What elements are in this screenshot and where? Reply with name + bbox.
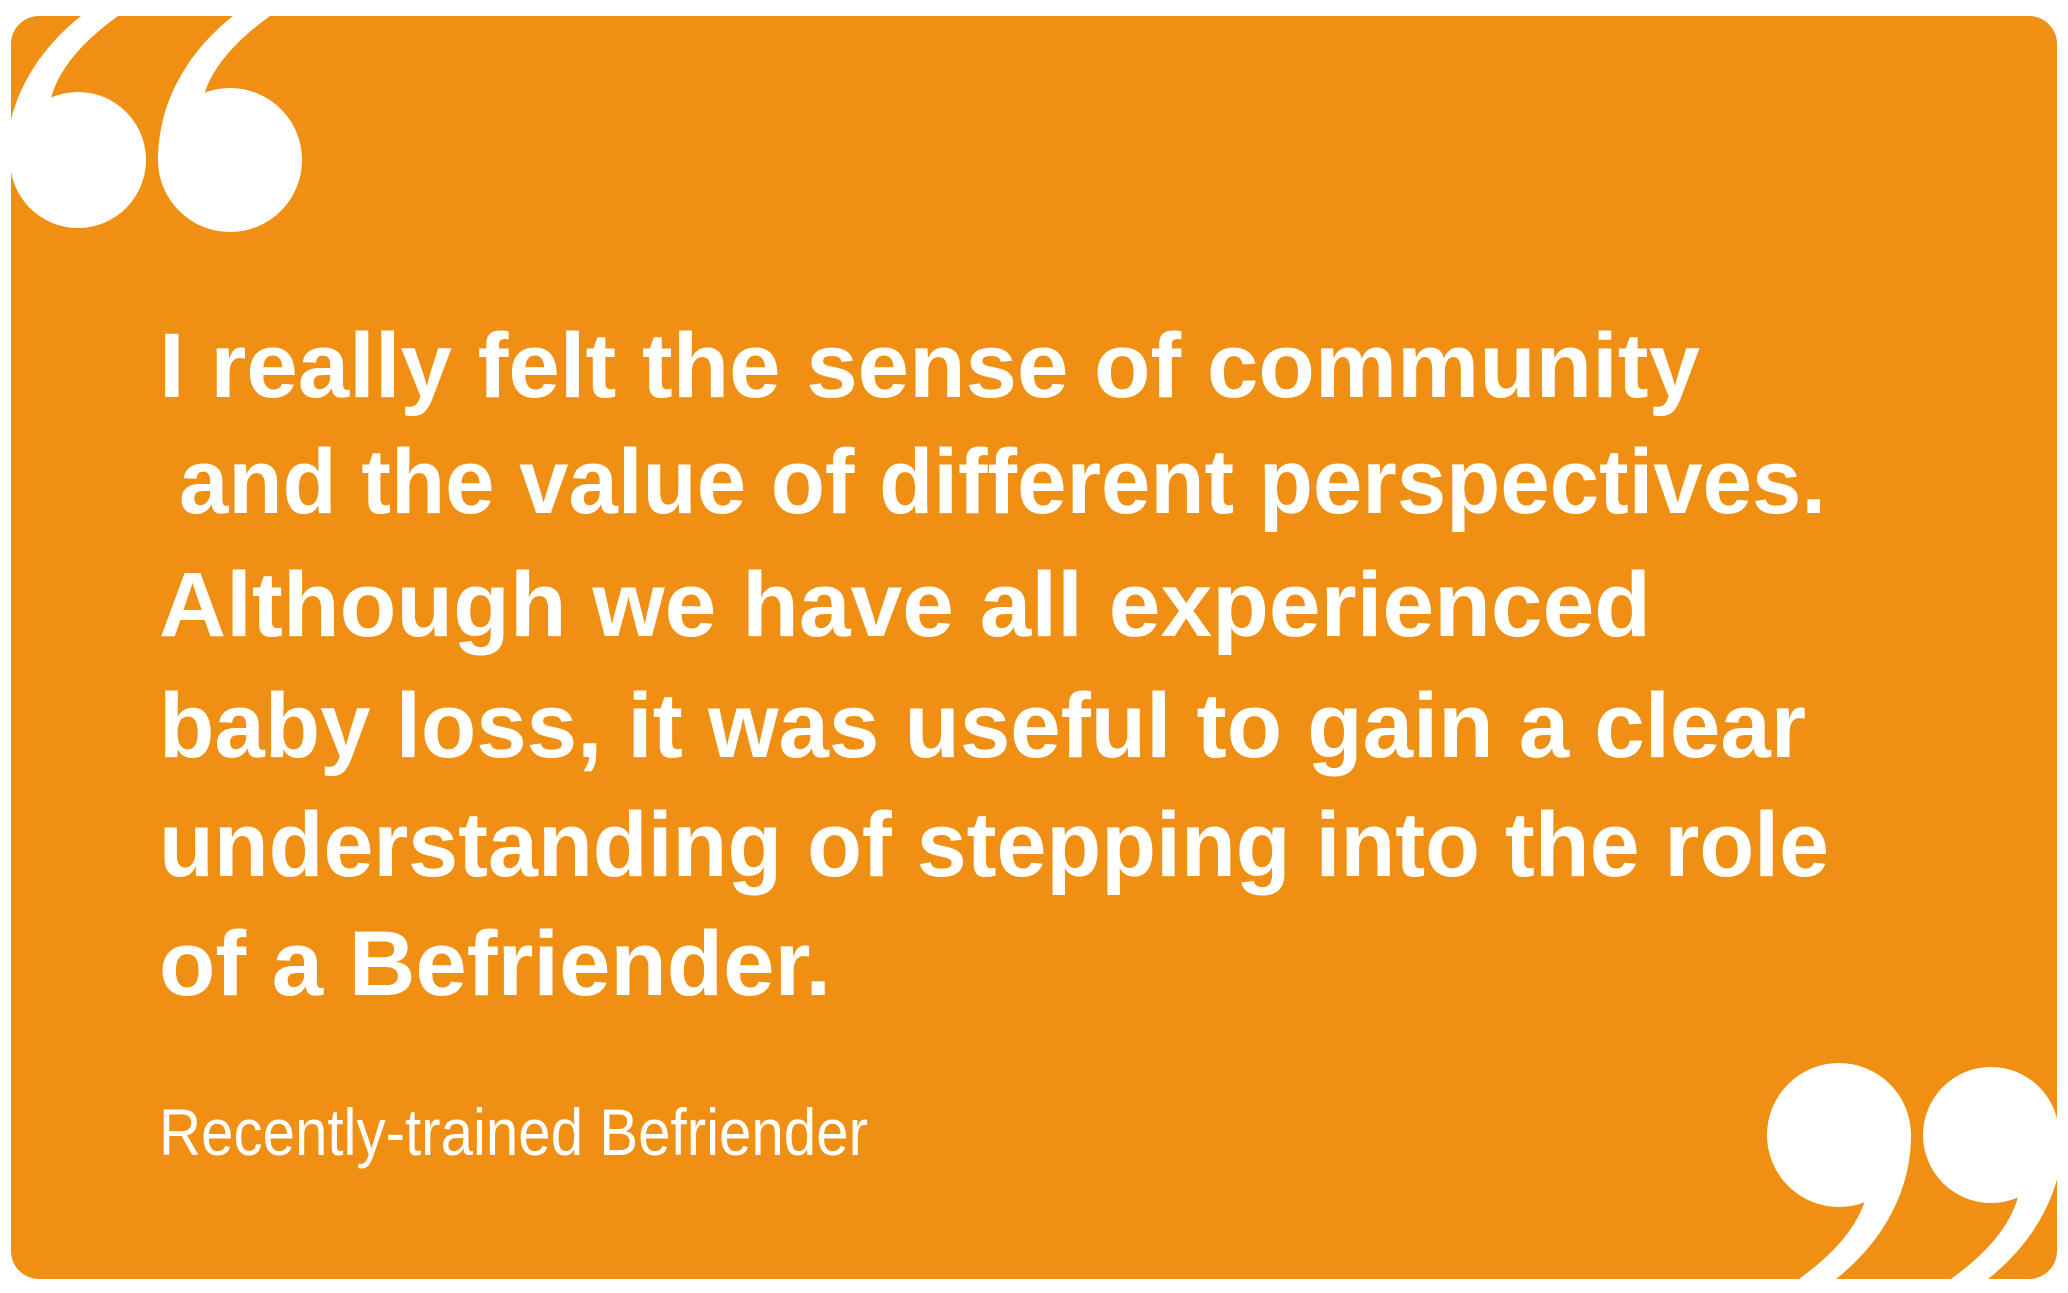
text block: quote: and the value of different perspectives.: [179, 431, 1826, 533]
text block: quote: understanding of stepping into the role: [159, 794, 1829, 896]
text block: quote: Although we have all experienced: [159, 554, 1651, 656]
text block: quote: I really felt the sense of community: [159, 315, 1700, 417]
text block: attribution: Recently-trained Befriender: [159, 1095, 868, 1169]
icon: opening quote marks: [6, 16, 302, 232]
text block: quote: [159, 315, 1829, 1015]
text block: quote: of a Befriender.: [159, 913, 831, 1015]
text block: quote: baby loss, it was useful to gain a clear: [159, 675, 1806, 777]
icon: closing quote marks: [1767, 1063, 2063, 1279]
